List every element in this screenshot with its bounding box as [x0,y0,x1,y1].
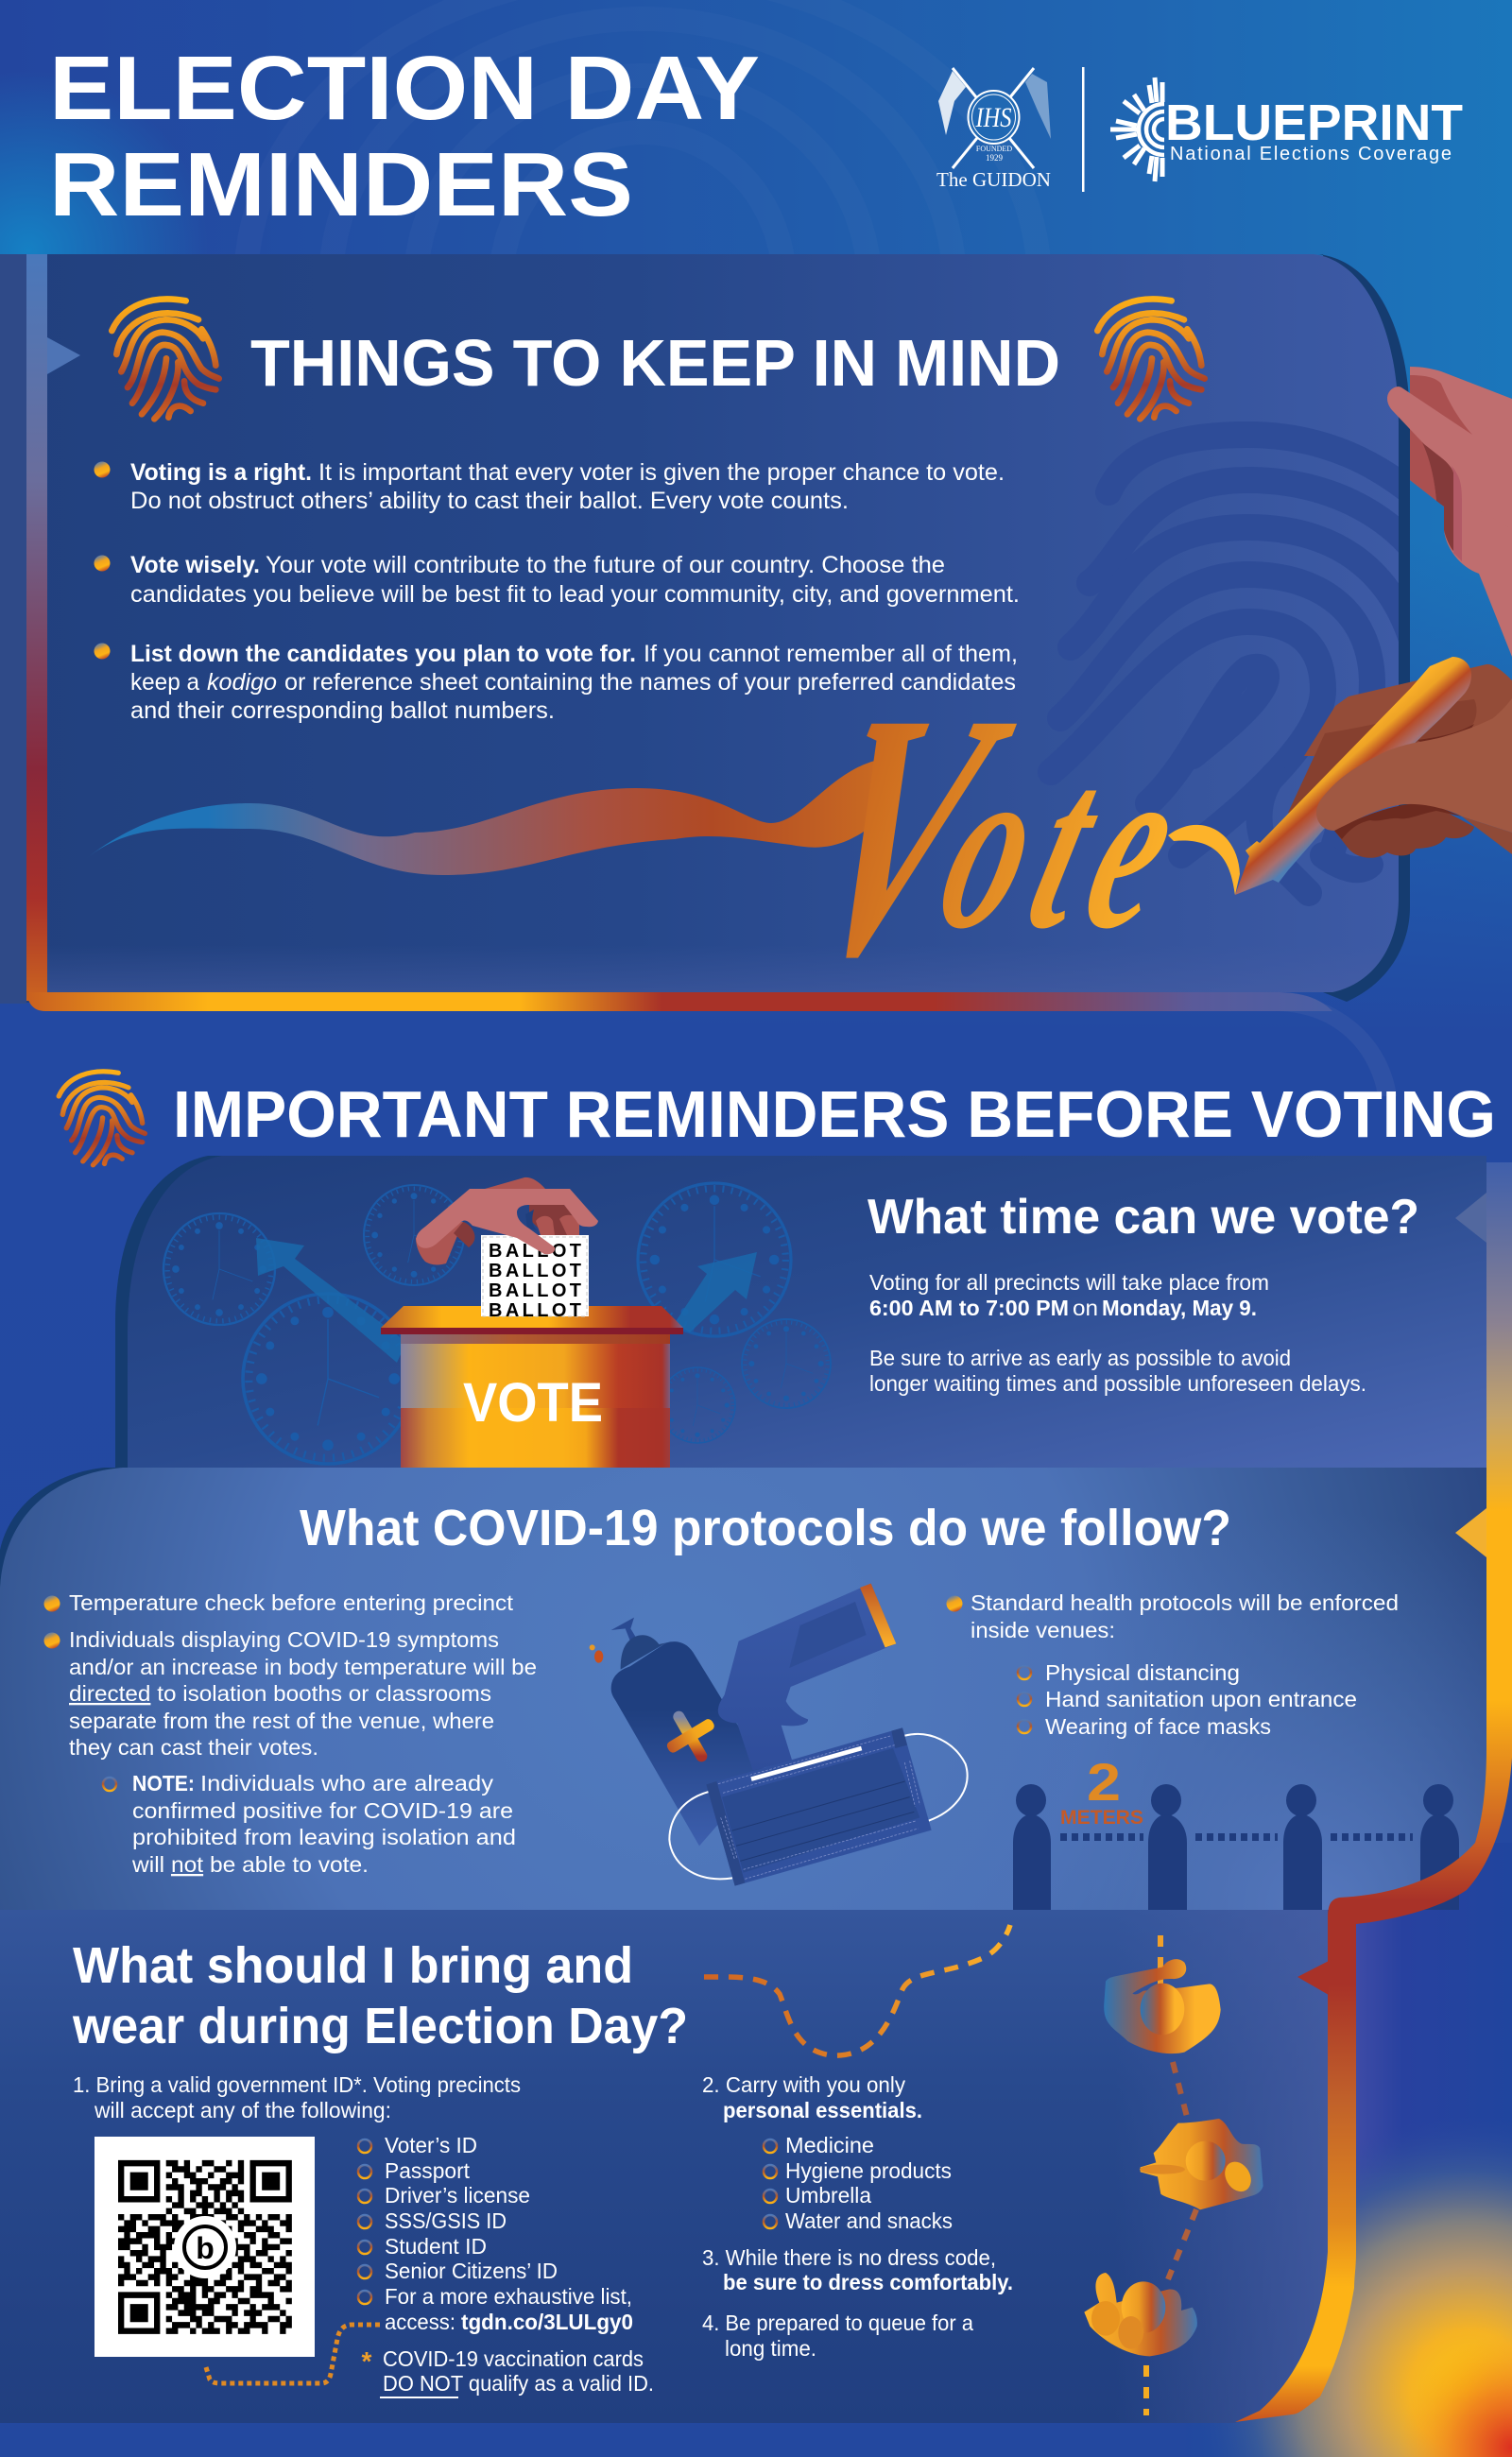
logo: Blueprint: BLUEPRINT [1165,94,1463,151]
ballot paper: BALLOT [489,1241,581,1262]
logo: Blueprint [1110,77,1463,181]
panel: what time can we vote [115,1156,1486,1468]
logo divider [1082,67,1085,192]
title: ELECTION DAY [49,38,760,139]
logo: The Guidon: The GUIDON [936,168,1051,191]
list: valid ids [358,2133,633,2334]
bullet: voting is a right: Voting is a right. [130,459,312,486]
list: health protocols: Wearing of face masks [1045,1714,1271,1739]
logo: Blueprint: National Elections Coverage [1170,144,1452,164]
ballot box: VOTE [463,1372,603,1434]
lettering: Vote: V [770,642,1043,1029]
panel: things to keep in mind [0,254,1512,1096]
pointer: covid section [1455,1508,1486,1557]
hand: writing with pen [1235,657,1512,895]
bottom gradient band [26,988,1332,1011]
lettering: Vote: ote [917,712,1220,979]
heading: what time can we vote: What time can we vote? [868,1190,1419,1245]
list: left protocols: separate from the rest of the venue, where [69,1709,494,1733]
bullet: vote wisely: candidates you believe will be best fit to lead your community, city, and government. [130,581,1020,608]
text: voting hours: Monday, May 9. [1102,1296,1257,1320]
list: valid ids: Driver’s license [385,2183,530,2208]
text: voting hours [869,1270,1366,1396]
list: left protocols: directed to isolation booths or classrooms [69,1681,491,1706]
bullet: list down the candidates: kodigo [207,669,277,696]
text: items 2 to 4: 4. Be prepared to queue for a [702,2311,973,2335]
ballot paper: BALLOT [489,1300,581,1321]
heading: what should i bring: What should I bring and [73,1937,633,1994]
heading: important reminders: IMPORTANT REMINDERS BEFORE VOTING [173,1077,1496,1151]
bullet: list down the candidates: If you cannot remember all of them, [644,641,1018,667]
list: valid ids: SSS/GSIS ID [385,2208,507,2233]
list: health protocols [947,1590,1399,1739]
fingerprint watermark [1117,421,1399,906]
bullet: vote wisely: Vote wisely. [130,552,260,578]
dashed path: right [1146,1935,1196,2415]
pointer: what time section [1455,1193,1486,1243]
logo: The Guidon: FOUNDED [976,145,1012,153]
text: voting hours: Voting for all precincts will take place from [869,1270,1269,1295]
list: valid ids: Voter’s ID [385,2133,477,2157]
distance label: 2 meters [1060,1752,1143,1829]
bullet: list down the candidates: List down the candidates you plan to vote for. [130,641,636,667]
arrows [256,1238,757,1363]
logo: The Guidon: IHS [975,102,1011,133]
heading: things to keep in mind: THINGS TO KEEP IN MIND [250,326,1060,400]
list: left protocols: and/or an increase in body temperature will be [69,1655,537,1679]
list: health protocols: inside venues: [971,1618,1115,1642]
icon: fingerprint section heading [59,1072,145,1165]
bullet: vote wisely: Your vote will contribute to the future of our country. Choose the [266,552,945,578]
s-curve gradient band [1235,1162,1512,2422]
text: item 1: 1. Bring a valid government ID*. Voting precincts [73,2072,521,2097]
text: items 2 to 4: long time. [725,2336,816,2361]
list: left protocols [43,1590,537,1760]
note: vaccination cards: DO NOT qualify as a valid ID. [383,2371,654,2396]
heading: covid protocols: What COVID-19 protocols do we follow? [300,1500,1231,1556]
bullet: vote wisely [94,552,1020,608]
left gradient strip [26,254,47,1001]
note [103,1771,516,1877]
logo: The Guidon [936,68,1051,191]
dashed path: top [704,1925,1010,2055]
note: prohibited from leaving isolation and [132,1825,516,1849]
heading: what should i bring: wear during Election Day? [72,1998,688,2054]
list: valid ids: Passport [385,2158,471,2183]
bullet: voting is a right [94,459,1005,514]
text: voting hours: longer waiting times and possible unforeseen delays. [869,1371,1366,1396]
text: items 2 to 4: personal essentials. [723,2098,922,2122]
bullet: list down the candidates: keep a [130,669,199,696]
ribbon [87,759,898,875]
bullet: voting is a right: Do not obstruct others’ ability to cast their ballot. Every vote counts. [130,488,849,514]
list: health protocols: Physical distancing [1045,1660,1240,1685]
clocks [163,1183,831,1464]
section pointer [47,337,80,374]
hand: holding panel [1387,367,1512,657]
distance label: 2 meters: 2 [1087,1752,1121,1812]
bullet: list down the candidates: or reference sheet containing the names of your preferred candidates [284,669,1016,696]
text: item 1 [73,2072,521,2122]
ballot paper: BALLOT [489,1261,581,1281]
ballot paper: BALLOT [489,1280,581,1301]
logo: The Guidon: 1929 [986,153,1004,163]
pen swash [1168,825,1240,895]
note: vaccination cards: COVID-19 vaccination cards [383,2346,644,2371]
text: items 2 to 4: Water and snacks [785,2208,953,2233]
bullet: list down the candidates: and their corresponding ballot numbers. [130,697,555,724]
text: voting hours: Be sure to arrive as early as possible to avoid [869,1346,1291,1370]
qr code: b [196,2231,215,2265]
list: valid ids: Senior Citizens’ ID [385,2259,558,2283]
list: valid ids: For a more exhaustive list, [385,2284,632,2309]
text: items 2 to 4: Hygiene products [785,2158,952,2183]
list: valid ids: access: [385,2310,455,2334]
icon: umbrella item [1104,1959,1221,2053]
list: left protocols: they can cast their votes. [69,1735,318,1760]
list: health protocols: Standard health protocols will be enforced [971,1590,1399,1615]
text: items 2 to 4: 3. While there is no dress code, [702,2245,996,2270]
title: REMINDERS [49,134,633,235]
ballot box [381,1306,683,1468]
note: NOTE: [132,1771,195,1796]
list: valid ids: tgdn.co/3LULgy0 [461,2310,633,2334]
bullet: voting is a right: It is important that every voter is given the proper chance to vote. [318,459,1005,486]
bullet: list down the candidates [94,641,1018,724]
list: valid ids: Student ID [385,2234,487,2259]
note: Individuals who are already [200,1771,494,1796]
pointer: bring section [1297,1961,1329,1995]
people silhouettes [1013,1784,1459,1910]
text: items 2 to 4 [702,2072,1013,2361]
icon: clothing item [1084,2273,1197,2356]
list: left protocols: Temperature check before entering precinct [69,1590,514,1615]
text: items 2 to 4: Medicine [785,2133,874,2157]
hand: casting ballot [416,1177,598,1264]
text: voting hours: on [1073,1296,1098,1320]
note: vaccination cards [362,2346,654,2398]
note: will not be able to vote. [131,1852,369,1877]
list: health protocols: Hand sanitation upon entrance [1045,1687,1357,1711]
ballot paper [481,1235,589,1321]
note: confirmed positive for COVID-19 are [132,1798,513,1823]
text: items 2 to 4: Umbrella [785,2183,871,2208]
panel: covid protocols [0,1468,1486,1910]
note: vaccination cards: * [362,2346,372,2376]
text: voting hours: 6:00 AM to 7:00 PM [869,1296,1069,1320]
title [49,38,760,235]
illustration: sanitizer, thermometer, mask [590,1584,968,1886]
distance dashed lines [1060,1833,1413,1841]
heading: what should i bring [72,1937,688,2054]
icon: essentials item [1140,2119,1263,2209]
text: items 2 to 4: 2. Carry with you only [702,2072,905,2097]
panel: what to bring [0,1910,1332,2423]
list: left protocols: Individuals displaying COVID-19 symptoms [69,1627,499,1652]
distance label: 2 meters: METERS [1060,1807,1143,1829]
icon: fingerprint left [112,299,219,419]
text: items 2 to 4: be sure to dress comfortably. [723,2270,1013,2294]
qr code [94,2137,315,2357]
icon: fingerprint right [1097,299,1205,419]
dotted connector [206,2325,380,2383]
text: item 1: will accept any of the following: [94,2098,391,2122]
